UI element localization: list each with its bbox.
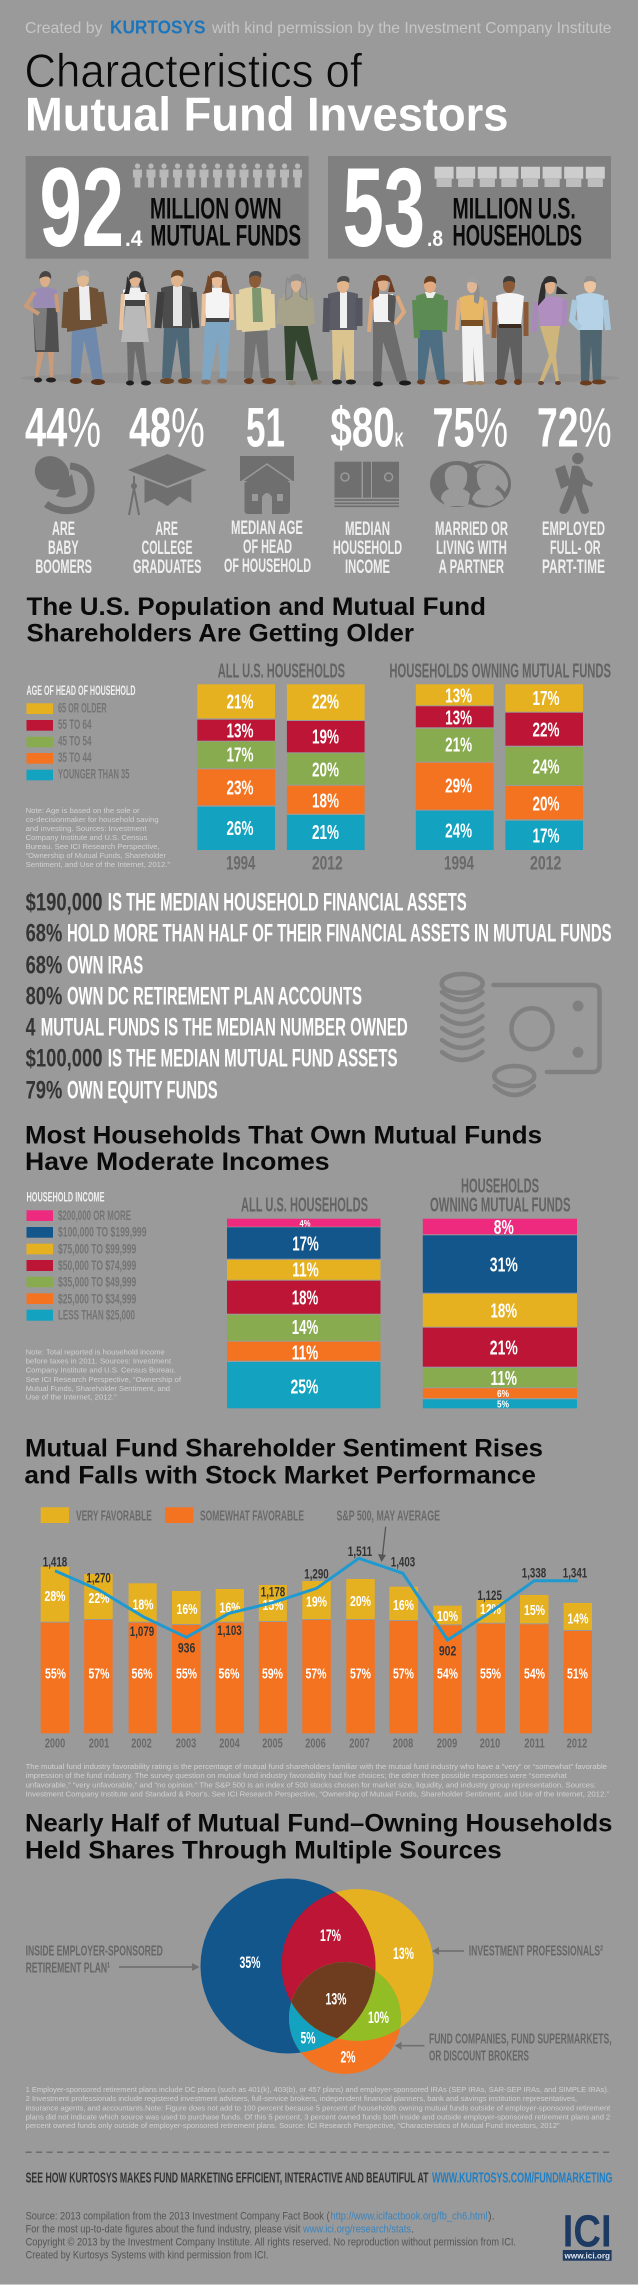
very favorable labels: 14% <box>568 1610 588 1627</box>
source text: Source: 2013 compilation from the 2013 Investment Company Fact Book ( <box>26 2210 330 2222</box>
yellow very favorable bars <box>41 1567 592 1630</box>
stat: 51 median age: MEDIAN AGE <box>231 518 303 539</box>
bar: 1994: 13% <box>226 720 254 742</box>
legend: household income: $35,000 TO $49,999 <box>58 1274 136 1290</box>
source text <box>26 2210 516 2262</box>
stat: 48% college graduates: 48% <box>129 396 205 459</box>
very favorable labels: 16% <box>220 1600 240 1617</box>
year labels: 2009 <box>437 1736 457 1751</box>
heading: multiple sources: Nearly Half of Mutual Fund–Owning Households <box>25 1810 612 1838</box>
chart: income, all U.S. households: 18% <box>292 1287 318 1309</box>
legend: age of head of household: 35 TO 44 <box>58 749 92 765</box>
text block: key figures: MUTUAL FUNDS IS THE MEDIAN NUMBER OWNED <box>41 1013 408 1041</box>
S&P 500 values: 1,418 <box>43 1554 67 1570</box>
stat: 48% college graduates: GRADUATES <box>133 557 201 578</box>
title <box>24 44 508 141</box>
stat: 44% baby boomers: BABY <box>48 538 79 559</box>
chart: income, households owning mutual funds: 21% <box>490 1337 518 1359</box>
stat: 75% married: A PARTNER <box>439 557 504 578</box>
credit line <box>25 18 612 38</box>
source text: ). <box>488 2210 495 2222</box>
chart: income, all U.S. households: 4% <box>300 1219 310 1229</box>
note: favorability: impression of the fund industry. The survey question on mutual fund industry favorability had five choices; the other three possible responses were “somewhat <box>26 1771 568 1780</box>
year labels: 2001 <box>89 1736 109 1751</box>
bar: 2012 <box>287 684 365 874</box>
illustration: row of fourteen investors <box>20 270 620 386</box>
panel: 92.4 million own mutual funds: MILLION OWN <box>150 192 282 225</box>
legend: household income: LESS THAN $25,000 <box>58 1307 135 1323</box>
S&P 500 values: 936 <box>178 1639 196 1655</box>
very favorable labels: 22% <box>88 1590 110 1607</box>
S&P 500 values <box>43 1543 587 1659</box>
stat: 51 median age: OF HEAD <box>243 537 292 558</box>
S&P 500 values: 902 <box>439 1643 457 1659</box>
source text: Copyright © 2013 by the Investment Company Institute. All rights reserved. No reproduction without permission from ICI. <box>26 2237 516 2249</box>
callout: employer-sponsored: INSIDE EMPLOYER-SPONSORED <box>26 1943 163 1960</box>
panel: 92.4 million own mutual funds <box>26 145 309 270</box>
chart: income, all U.S. households: 11% <box>292 1260 319 1282</box>
legend: favorability: VERY FAVORABLE <box>76 1508 152 1525</box>
heading: sentiment: Mutual Fund Shareholder Sentiment Rises <box>25 1435 543 1463</box>
legend: favorability: S&P 500, MAY AVERAGE <box>336 1508 440 1525</box>
note: income: Mutual Funds, Shareholder Sentiment, and <box>26 1384 170 1393</box>
chart: income, households owning mutual funds: 18% <box>491 1300 517 1322</box>
very favorable labels <box>44 1588 588 1627</box>
icon: graduation cap <box>128 454 207 515</box>
person 2 <box>65 270 105 385</box>
bar: 2012: 22% <box>312 691 339 713</box>
heading: population getting older <box>26 593 486 648</box>
very favorable labels: 16% <box>393 1597 414 1614</box>
stat: 51 median age <box>224 396 311 577</box>
stat: 72% employed <box>537 396 612 578</box>
somewhat favorable labels <box>45 1665 588 1682</box>
stat: 75% married: LIVING WITH <box>436 538 507 559</box>
bar: 1994 <box>416 684 494 874</box>
panel: 92.4 million own mutual funds: MUTUAL FUNDS <box>150 220 301 253</box>
note: favorability: unfavorable,” “very unfavorable,” and “no opinion.” The S&P 500 is an index of 500 stocks chosen for market size, liquidity, and industry group representation. Sources: <box>26 1780 596 1789</box>
source text: For the most up-to-date figures about the fund industry, please visit <box>26 2223 300 2235</box>
legend: household income: $50,000 TO $74,999 <box>58 1257 136 1273</box>
callout: investment professionals <box>432 1943 603 1960</box>
legend: household income: $200,000 OR MORE <box>58 1207 131 1223</box>
note: income: See ICI Research Perspective, “Ownership of <box>26 1375 182 1384</box>
somewhat favorable labels: 57% <box>88 1665 110 1682</box>
bar: 1994: 17% <box>226 745 254 767</box>
icon: couple <box>430 461 510 507</box>
icon: house <box>240 456 294 514</box>
bar: 1994: 13% <box>445 685 472 707</box>
bar: 2012: 22% <box>532 720 560 742</box>
year labels: 2000 <box>45 1736 65 1751</box>
note: favorability: Investment Company Institute and Standard & Poor's. See ICI Research Perspective, “Ownership of Mutual Funds, Shareholder Sentiment, and Use of the Internet, 2012.” <box>26 1790 609 1799</box>
logo: ICI: www.ici.org <box>564 2250 610 2260</box>
heading: moderate incomes: Most Households That Own Mutual Funds <box>25 1121 542 1149</box>
heading: sentiment: and Falls with Stock Market Performance <box>24 1461 536 1489</box>
legend: household income: $75,000 TO $99,999 <box>58 1240 136 1256</box>
legend: age of head of household: 55 TO 64 <box>58 716 92 732</box>
bar: 2012: 20% <box>312 760 339 782</box>
year labels: 2004 <box>219 1736 240 1751</box>
note: income: Company Institute and U.S. Census Bureau. <box>26 1366 176 1375</box>
note: favorability: The mutual fund industry favorability rating is the percentage of mutual fund shareholders familiar with the mutual fund industry who have a “very” or “somewhat” favorable <box>26 1762 607 1771</box>
very favorable labels: 28% <box>44 1588 66 1605</box>
very favorable labels: 10% <box>437 1608 458 1625</box>
note: age: co-decisionmaker for household saving <box>26 815 159 824</box>
legend: age of head of household: YOUNGER THAN 35 <box>58 766 130 782</box>
source text: Created by Kurtosys Systems with kind permission from ICI. <box>26 2250 269 2262</box>
note: age: Company Institute and U.S. Census <box>26 833 148 842</box>
icon: stack of money <box>334 462 399 506</box>
heading: moderate incomes <box>25 1121 542 1176</box>
person 13 <box>534 276 568 385</box>
person 10 <box>415 276 450 384</box>
heading: multiple sources: Held Shares Through Multiple Sources <box>25 1836 502 1864</box>
note: age: Sentiment, and Use of the Internet, 2012.” <box>26 860 170 869</box>
very favorable labels: 15% <box>524 1602 545 1619</box>
year labels: 2010 <box>480 1736 500 1751</box>
panel: 53.8 million U.S. households <box>328 145 611 270</box>
note: income: before taxes in 2011. Sources: Investment <box>26 1357 172 1366</box>
somewhat favorable labels: 55% <box>480 1665 501 1682</box>
chart: income, all U.S. households: 17% <box>292 1234 319 1256</box>
credit line: KURTOSYS <box>110 18 206 38</box>
footnotes: 1 Employer-sponsored retirement plans include DC plans (such as 401(k), 403(b), or 457 plans) and employer-sponsored IRAs (SEP IRAs, SAR-SEP IRAs, and SIMPLE IRAs). <box>26 2085 609 2094</box>
somewhat favorable labels: 54% <box>437 1665 458 1682</box>
chart: income, all U.S. households: ALL U.S. HOUSEHOLDS <box>241 1194 368 1216</box>
note: age: “Ownership of Mutual Funds, Shareholder <box>26 851 166 860</box>
bar: 1994 <box>197 684 275 874</box>
icon: row of people <box>133 163 302 188</box>
bar: 1994: 26% <box>226 818 254 840</box>
stat: 44% baby boomers: BOOMERS <box>35 557 92 578</box>
stat: 48% college graduates: ARE <box>155 519 178 540</box>
S&P 500 values: 1,341 <box>563 1565 587 1581</box>
year labels: 2002 <box>131 1736 152 1751</box>
very favorable labels: 19% <box>306 1594 327 1611</box>
very favorable labels: 12% <box>480 1601 501 1618</box>
chart: income, all U.S. households: 14% <box>292 1317 318 1339</box>
source text: www.ici.org/research/stats <box>302 2223 411 2235</box>
arrow: S&P 500 pointer <box>378 1527 386 1562</box>
S&P 500 values: 1,079 <box>130 1623 154 1639</box>
legend: favorability: SOMEWHAT FAVORABLE <box>200 1508 304 1525</box>
chart: income, households owning mutual funds: 5% <box>497 1400 509 1411</box>
bar: 1994: 21% <box>226 692 254 714</box>
very favorable labels: 15% <box>262 1597 284 1614</box>
stat: 51 median age: OF HOUSEHOLD <box>224 556 311 577</box>
text block: key figures: 80% <box>26 982 62 1010</box>
stat: 44% baby boomers: ARE <box>52 519 75 540</box>
stat: $80k median income <box>330 396 404 578</box>
stat: 75% married: MARRIED OR <box>435 519 508 540</box>
somewhat favorable labels: 56% <box>132 1665 152 1682</box>
venn values: 10% <box>368 2008 389 2027</box>
panel: 53.8 million U.S. households: .8 <box>427 226 443 251</box>
year labels: 2006 <box>305 1736 326 1751</box>
year labels <box>45 1736 587 1751</box>
chart: income, households owning mutual funds: 11% <box>491 1368 517 1390</box>
S&P 500 values: 1,270 <box>86 1569 111 1585</box>
icon: row of houses <box>435 167 605 187</box>
callout: fund companies <box>395 2030 612 2065</box>
stat: $80k median income: $80 <box>330 396 395 459</box>
person 9 <box>369 275 411 386</box>
chart: all U.S. households by age: ALL U.S. HOUSEHOLDS <box>218 660 345 682</box>
text block: key figures: 68% <box>26 951 62 979</box>
note: age: and investing. Sources: Investment <box>26 824 147 833</box>
somewhat favorable labels: 56% <box>218 1665 240 1682</box>
text block: key figures <box>26 889 612 1104</box>
S&P 500 values: 1,103 <box>217 1622 242 1638</box>
legend: age of head of household <box>26 683 136 782</box>
bar: 1994: 21% <box>445 735 472 757</box>
person 12 <box>494 276 526 385</box>
heading: moderate incomes: Have Moderate Incomes <box>25 1148 330 1176</box>
chart: income, all U.S. households: 11% <box>292 1342 318 1364</box>
note: age: Note: Age is based on the sole or <box>26 806 140 815</box>
year labels: 2007 <box>349 1736 370 1751</box>
stat: 72% employed: 72% <box>537 396 612 459</box>
icon: pacifier <box>28 449 91 511</box>
text block: key figures: 68% <box>26 920 62 948</box>
chart: income, households owning mutual funds: 31% <box>490 1255 518 1277</box>
person 8 <box>326 276 359 384</box>
stat: 72% employed: FULL- OR <box>550 538 601 559</box>
year labels: 2011 <box>524 1736 545 1751</box>
note: age: Bureau. See ICI Research Perspective, <box>26 842 160 851</box>
panel: 92.4 million own mutual funds: 92 <box>40 145 124 270</box>
footnotes: plans did not indicate which source was used to purchase funds. Of this 5 percent, 3 percent owned funds both inside and outside employer-sponsored retirement plans and 2 <box>26 2112 610 2121</box>
chart: income, households owning mutual funds: HOUSEHOLDS <box>461 1175 539 1197</box>
callout: employer-sponsored <box>26 1943 199 1977</box>
bar: 2012: 20% <box>532 794 560 816</box>
stat: $80k median income: K <box>395 430 404 452</box>
venn values: 35% <box>240 1953 260 1972</box>
bar: 1994: 13% <box>445 707 472 729</box>
source text: . <box>411 2223 414 2235</box>
footnotes <box>26 2085 611 2130</box>
somewhat favorable labels: 55% <box>176 1665 197 1682</box>
heading: multiple sources <box>25 1810 612 1864</box>
heading: population getting older: The U.S. Population and Mutual Fund <box>26 593 486 621</box>
text block: key figures: OWN IRAS <box>67 951 143 979</box>
venn values <box>240 1926 414 2066</box>
somewhat favorable labels: 54% <box>524 1665 545 1682</box>
chart: income, households owning mutual funds <box>423 1175 577 1411</box>
bar: 1994: 1994 <box>444 853 474 874</box>
text block: key figures: $190,000 <box>26 889 103 917</box>
very favorable labels: 20% <box>350 1593 371 1610</box>
bar: 2012: 2012 <box>312 853 343 874</box>
bar: 1994: 1994 <box>226 853 256 874</box>
logo: ICI: ICI <box>563 2206 612 2257</box>
somewhat favorable labels: 57% <box>393 1665 414 1682</box>
legend: household income: HOUSEHOLD INCOME <box>26 1190 104 1205</box>
credit line: Created by <box>25 20 102 37</box>
somewhat favorable labels: 57% <box>306 1665 326 1682</box>
text block: key figures: IS THE MEDIAN MUTUAL FUND ASSETS <box>108 1045 398 1073</box>
S&P 500 values: 1,403 <box>391 1554 415 1570</box>
somewhat favorable labels: 51% <box>567 1665 588 1682</box>
legend: household income: $25,000 TO $34,999 <box>58 1290 136 1306</box>
year labels: 2012 <box>567 1736 587 1751</box>
person 4 <box>158 270 196 384</box>
legend: household income <box>26 1190 147 1323</box>
stat: $80k median income: MEDIAN <box>345 519 390 540</box>
stat: 75% married: 75% <box>432 396 508 459</box>
person 7 <box>279 274 322 386</box>
legend: age of head of household: 45 TO 54 <box>58 733 92 749</box>
venn values: 17% <box>320 1926 341 1945</box>
footnotes: insurance agents, and accountants.Note: Figure does not add to 100 percent because 5 percent of households owning mutual funds outside of employer-sponsored retirement <box>26 2103 611 2112</box>
S&P 500 values: 1,290 <box>304 1566 329 1582</box>
bar: 2012: 2012 <box>530 853 561 874</box>
legend: favorability <box>41 1507 440 1525</box>
heading: population getting older: Shareholders Are Getting Older <box>26 620 414 648</box>
somewhat favorable labels: 59% <box>262 1665 283 1682</box>
chart: income, households owning mutual funds: 8% <box>494 1217 514 1239</box>
bar: 1994: 29% <box>445 775 472 797</box>
orange somewhat favorable bars <box>41 1620 592 1733</box>
heading: sentiment <box>24 1435 543 1489</box>
person 5 <box>201 271 232 384</box>
note: income <box>26 1348 182 1402</box>
text block: key figures: $100,000 <box>26 1045 103 1073</box>
stat: 51 median age: 51 <box>246 396 285 459</box>
bar: 1994: 24% <box>445 820 472 842</box>
S&P 500 values: 1,178 <box>261 1584 285 1600</box>
callout: employer-sponsored: RETIREMENT PLAN¹ <box>26 1960 110 1977</box>
stat: $80k median income: INCOME <box>345 557 390 578</box>
credit line: with kind permission by the Investment Company Institute <box>211 20 612 37</box>
bar: 2012: 18% <box>312 790 339 812</box>
bar: 2012: 17% <box>532 688 560 710</box>
bar: 2012: 24% <box>532 756 560 778</box>
bar: 2012: 21% <box>312 822 339 844</box>
legend: age of head of household: AGE OF HEAD OF HOUSEHOLD <box>26 683 136 698</box>
callout: fund companies: OR DISCOUNT BROKERS <box>429 2048 529 2065</box>
venn values: 2% <box>340 2047 356 2066</box>
somewhat favorable labels: 57% <box>350 1665 371 1682</box>
chart: venn diagram of sources <box>200 1878 434 2074</box>
note: income: Note: Total reported is household income <box>26 1348 165 1357</box>
venn values: 5% <box>300 2028 316 2047</box>
note: favorability <box>26 1762 609 1799</box>
stat: 48% college graduates: COLLEGE <box>142 538 192 559</box>
stat: 44% baby boomers: 44% <box>25 396 101 459</box>
somewhat favorable labels: 55% <box>45 1665 66 1682</box>
person 3 <box>121 271 151 386</box>
text block: key figures: OWN EQUITY FUNDS <box>67 1076 218 1104</box>
bar: 1994: 23% <box>226 777 254 799</box>
stat: 48% college graduates <box>128 396 207 578</box>
icon: coins and banknote <box>442 974 600 1095</box>
year labels: 2005 <box>262 1736 283 1751</box>
very favorable labels: 16% <box>176 1601 198 1618</box>
venn values: 13% <box>393 1944 414 1963</box>
year labels: 2008 <box>393 1736 413 1751</box>
legend: age of head of household: 65 OR OLDER <box>58 700 107 716</box>
bar: 2012 <box>505 684 583 874</box>
chart: households owning mutual funds by age <box>389 660 611 874</box>
person 11 <box>457 277 488 385</box>
S&P 500 values: 1,511 <box>348 1543 372 1559</box>
panel: 92.4 million own mutual funds: .4 <box>125 226 143 251</box>
chart: income, households owning mutual funds: 6% <box>497 1389 509 1400</box>
note: age <box>26 806 170 869</box>
icon: hiker <box>555 453 593 514</box>
stat: 44% baby boomers <box>25 396 101 578</box>
chart: favorability bars 2000-2012 with S&P 500 line <box>41 1543 592 1751</box>
panel: 53.8 million U.S. households: 53 <box>343 145 425 270</box>
person 6 <box>239 271 276 384</box>
text block: key figures: 4 <box>26 1013 35 1041</box>
S&P 500 values: 1,125 <box>478 1587 502 1603</box>
text block: key figures: 79% <box>26 1076 62 1104</box>
stat: $80k median income: HOUSEHOLD <box>333 538 402 559</box>
text block: key figures: OWN DC RETIREMENT PLAN ACCOUNTS <box>67 982 362 1010</box>
S&P 500 line <box>55 1558 578 1640</box>
chart: income, all U.S. households: 25% <box>290 1376 319 1398</box>
title: Characteristics of <box>24 44 363 97</box>
venn values: 13% <box>326 1989 346 2008</box>
year labels: 2003 <box>176 1736 196 1751</box>
title: Mutual Fund Investors <box>25 88 508 141</box>
footnotes: 2 Investment professionals include registered investment advisers, full-service brokers, independent financial planners, bank and savings institution representatives, <box>26 2094 577 2103</box>
panel: 53.8 million U.S. households: MILLION U.S. <box>452 192 576 225</box>
source text: http://www.icifactbook.org/fb_ch6.html <box>330 2210 488 2222</box>
bar: 2012: 19% <box>312 726 339 748</box>
stat: 75% married <box>430 396 510 578</box>
note: income: Use of the Internet, 2012.” <box>26 1393 117 1402</box>
very favorable labels: 18% <box>132 1596 154 1613</box>
person 14 <box>572 276 608 386</box>
bar: 2012: 17% <box>532 825 560 847</box>
footnotes: percent owned funds only outside of employer-sponsored retirement plans. Source: ICI Research Perspective, “Characteristics of Mutual Fund Investors, 2012” <box>26 2121 560 2130</box>
chart: all U.S. households by age <box>197 660 365 874</box>
person 1 <box>26 271 59 382</box>
legend: household income: $100,000 TO $199,999 <box>58 1224 147 1240</box>
chart: income, all U.S. households <box>227 1194 380 1408</box>
S&P 500 values: 1,338 <box>522 1565 546 1581</box>
